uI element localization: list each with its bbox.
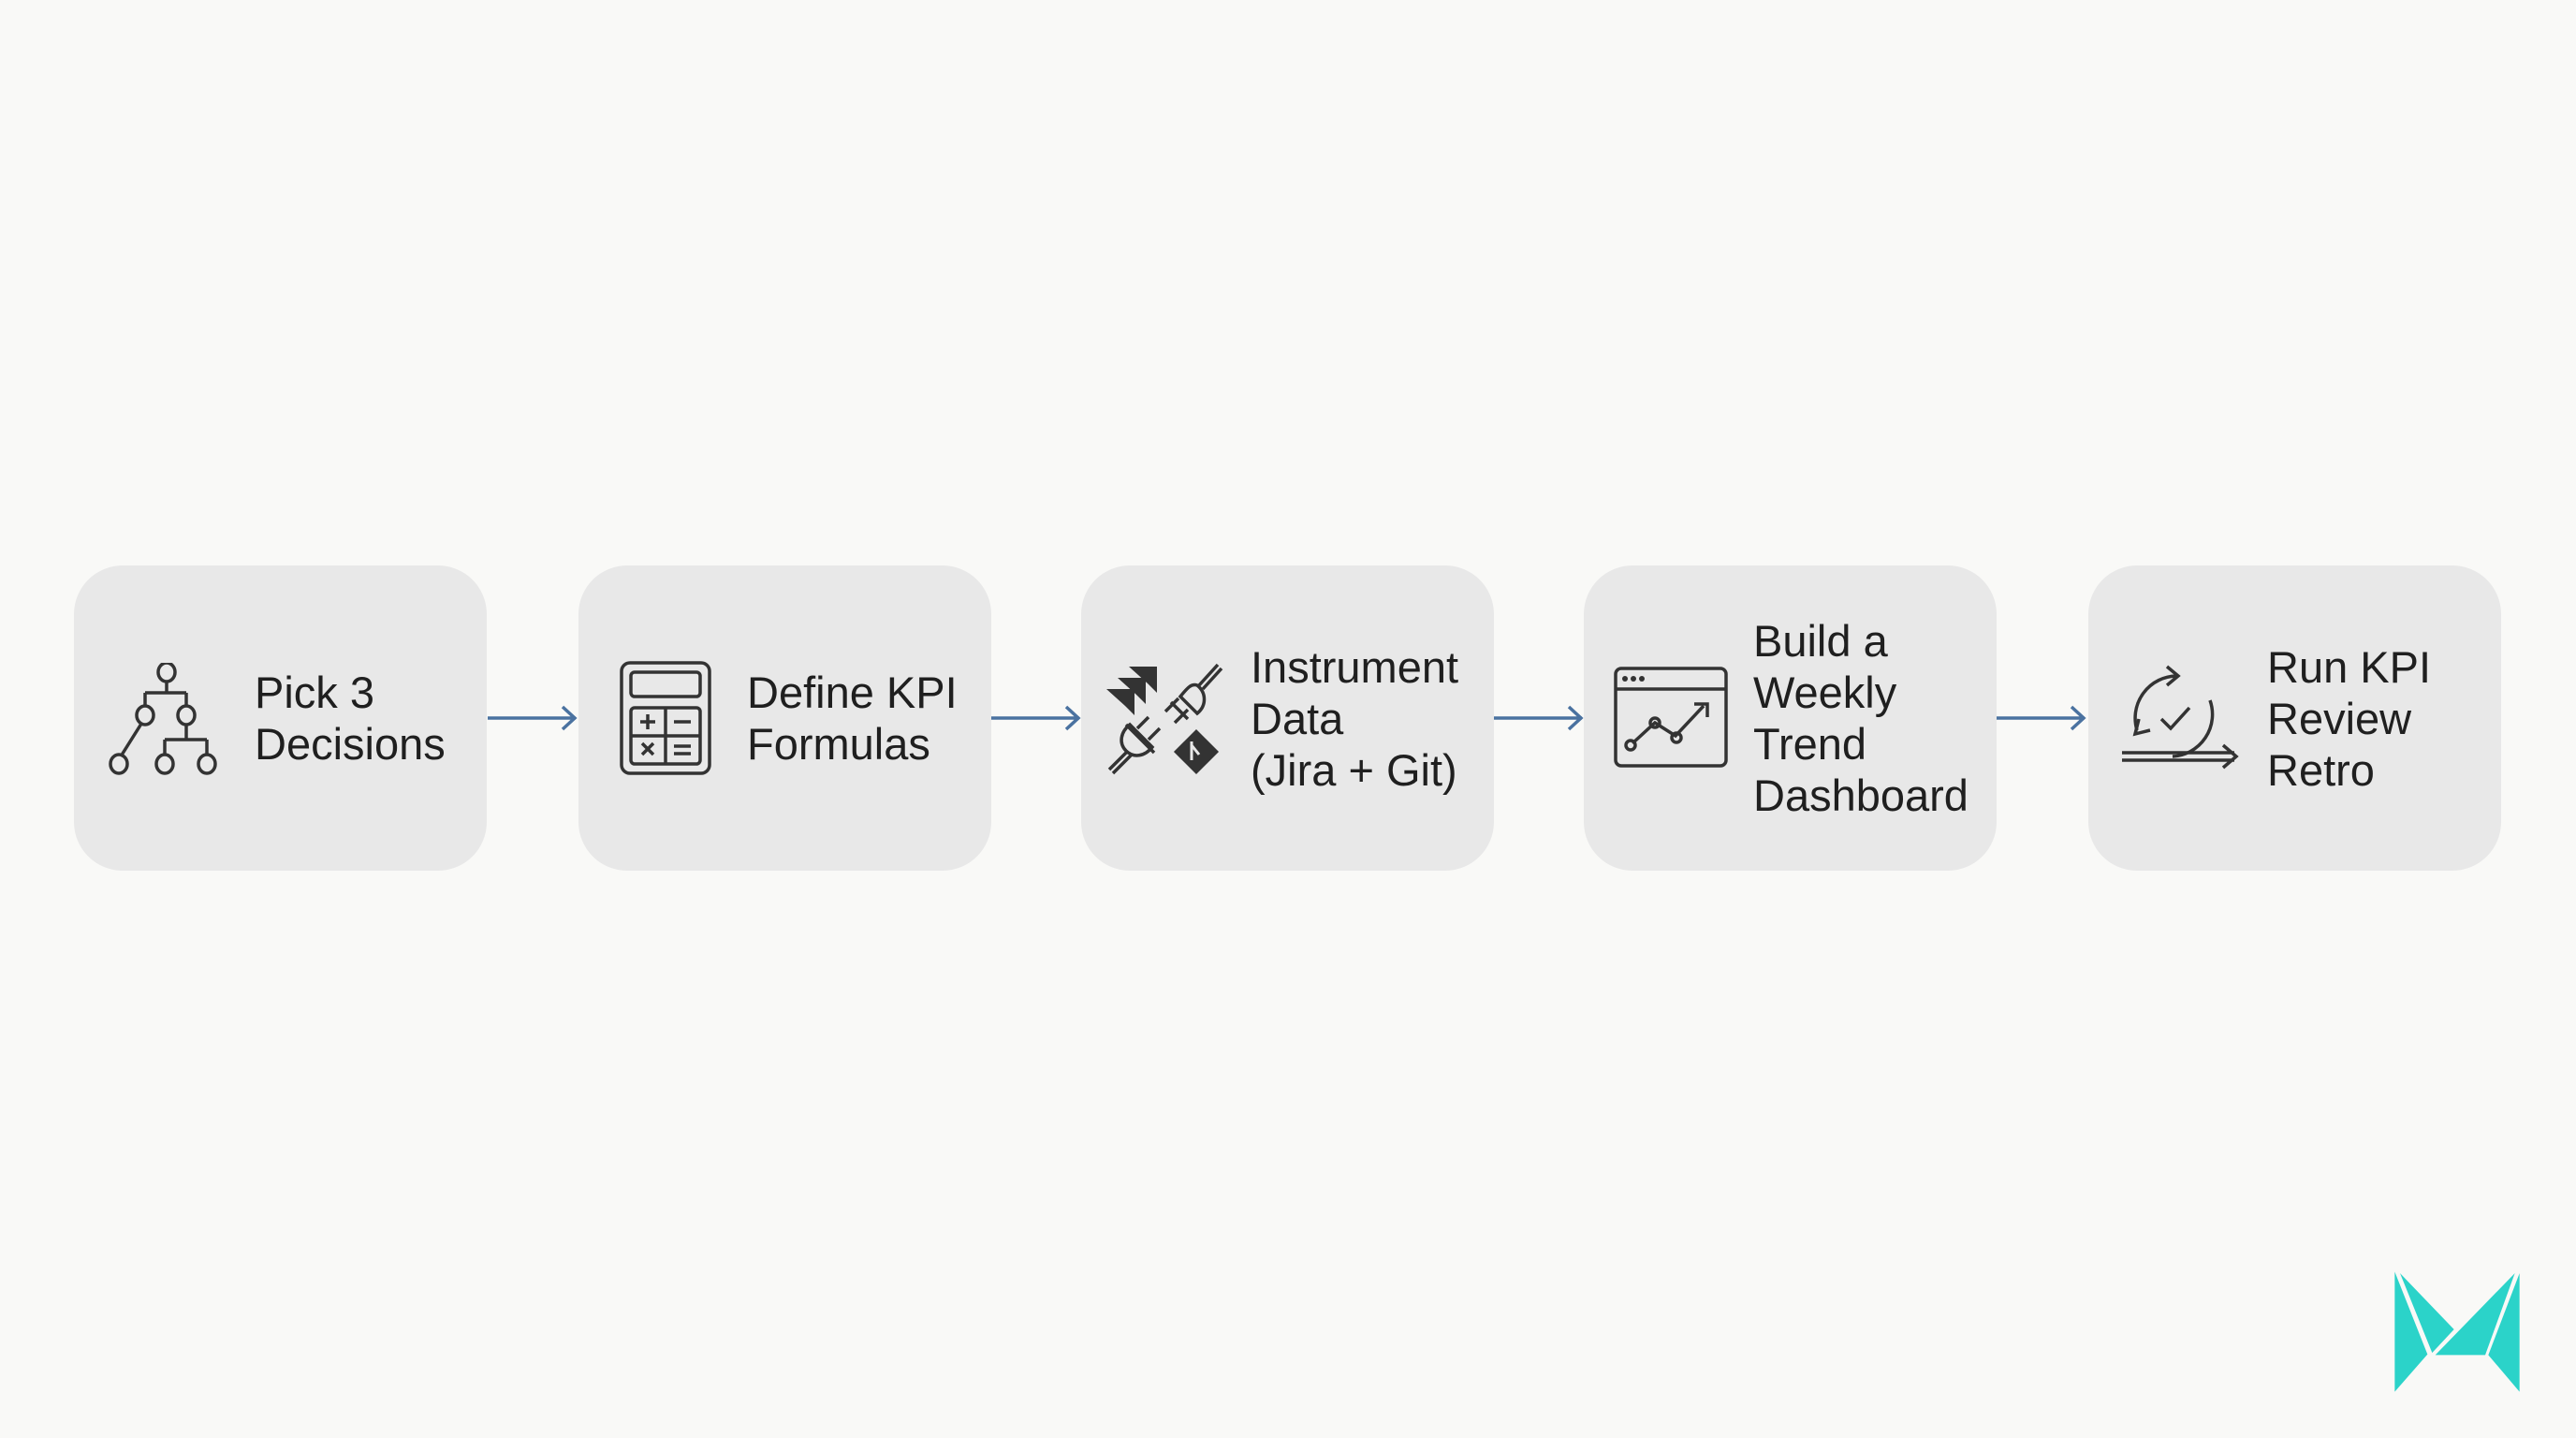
step 5: Run KPI Review Retro	[2088, 565, 2501, 871]
logo	[2394, 1271, 2520, 1391]
arrow 2	[991, 706, 1080, 730]
label: Weekly	[1753, 668, 1896, 717]
label	[255, 668, 446, 769]
label	[1753, 616, 1969, 820]
icon: retro cycle	[2122, 665, 2239, 770]
label: Retro	[2267, 745, 2375, 794]
icon: decision tree	[109, 663, 217, 775]
label: Run KPI	[2267, 642, 2431, 691]
icon: jira + git plugs	[1106, 663, 1222, 775]
icon: calculator	[620, 661, 711, 775]
label	[1251, 642, 1458, 795]
label: Review	[2267, 693, 2411, 743]
icon: dashboard window	[1614, 667, 1728, 768]
step 2: Define KPI Formulas	[578, 565, 991, 871]
label: Trend	[1753, 719, 1866, 769]
label: Build a	[1753, 616, 1888, 666]
label: Data	[1251, 693, 1343, 743]
arrow 4	[1997, 706, 2086, 730]
label	[747, 668, 958, 769]
arrow 3	[1494, 706, 1584, 730]
step 3: Instrument Data	[1081, 565, 1494, 871]
label: Decisions	[255, 719, 446, 769]
label: (Jira + Git)	[1251, 745, 1457, 794]
label: Instrument	[1251, 642, 1458, 691]
label: Define KPI	[747, 668, 958, 717]
label: Formulas	[747, 719, 930, 769]
label	[2267, 642, 2431, 794]
label: Dashboard	[1753, 770, 1969, 820]
arrow 1	[488, 706, 577, 730]
step 1: Pick 3 Decisions	[74, 565, 487, 871]
step 4: Build a Weekly Trend Dashboard	[1584, 565, 1997, 871]
label: Pick 3	[255, 668, 374, 717]
